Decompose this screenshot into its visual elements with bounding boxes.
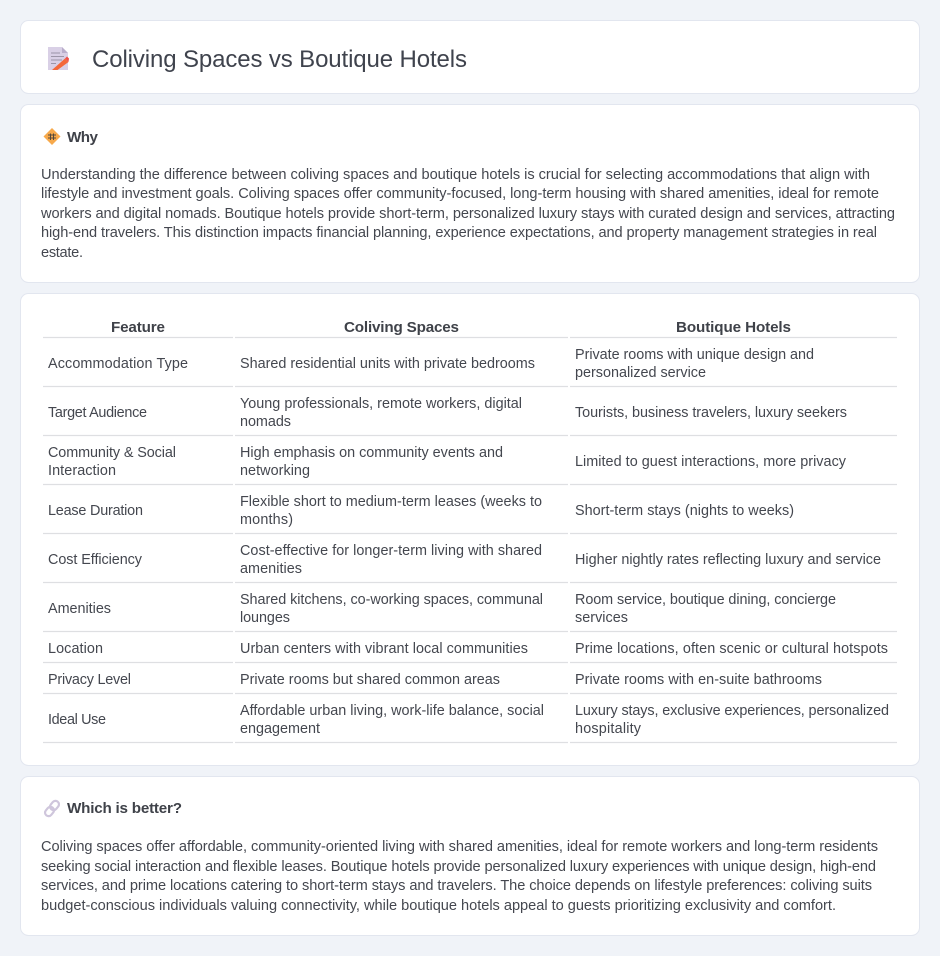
row: lease duration xyxy=(48,494,794,528)
row: ideal use: Affordable urban living, work-life balance, social xyxy=(240,703,544,719)
row: community and social interaction: networking xyxy=(240,463,310,479)
icon: link xyxy=(44,799,60,818)
row: amenities: services xyxy=(575,610,628,626)
panel: title xyxy=(20,20,920,94)
why paragraph: lifestyle and investment goals. Coliving spaces offer community-focused, long-term housing with shared amenities, ideal for remote xyxy=(41,186,879,202)
icon: document with pencil xyxy=(48,47,69,70)
row: community and social interaction: Community & Social xyxy=(48,445,176,461)
row: ideal use: Ideal Use xyxy=(48,712,106,728)
row: ideal use: hospitality xyxy=(575,721,642,737)
which is better paragraph: services, and prime locations catering to short-term stays and travelers. The choice depends on lifestyle preferences: coliving suits xyxy=(41,878,872,894)
row: cost efficiency: amenities xyxy=(240,561,302,577)
why paragraph: estate. xyxy=(41,245,83,261)
row: ideal use: engagement xyxy=(240,721,320,737)
why paragraph: workers and digital nomads. Boutique hotels provide short-term, personalized luxury stays with curated design and services, attracting xyxy=(40,206,895,222)
row: community and social interaction xyxy=(48,445,847,479)
icon: warning diamond xyxy=(44,128,60,145)
row: accommodation type xyxy=(48,347,814,381)
row: amenities: Amenities xyxy=(48,601,111,617)
row: location: Prime locations, often scenic or cultural hotspots xyxy=(575,641,888,657)
panel: comparison table xyxy=(20,294,920,766)
heading: why: Why xyxy=(67,129,99,146)
why paragraph: Understanding the difference between coliving spaces and boutique hotels is crucial for selecting accommodations that align with xyxy=(41,167,870,183)
row: cost efficiency: Cost-effective for longer-term living with shared xyxy=(240,543,542,559)
why paragraph xyxy=(40,167,895,261)
row: privacy level xyxy=(48,672,822,688)
row: accommodation type: personalized service xyxy=(575,365,706,381)
row: accommodation type: Accommodation Type xyxy=(48,356,188,372)
table header row: Boutique Hotels xyxy=(676,319,791,336)
row: target audience xyxy=(48,396,847,430)
row: lease duration: Short-term stays (nights to weeks) xyxy=(575,503,794,519)
row: privacy level: Private rooms with en-suite bathrooms xyxy=(575,672,822,688)
row: community and social interaction: High emphasis on community events and xyxy=(240,445,503,461)
row: amenities: lounges xyxy=(240,610,290,626)
row: lease duration: months) xyxy=(240,512,293,528)
panel: why xyxy=(20,104,920,282)
row: target audience: Tourists, business travelers, luxury seekers xyxy=(575,405,847,421)
row: amenities: Room service, boutique dining, concierge xyxy=(575,592,836,608)
row: ideal use: Luxury stays, exclusive experiences, personalized xyxy=(575,703,889,719)
row: cost efficiency xyxy=(48,543,881,577)
row: lease duration: Flexible short to medium-term leases (weeks to xyxy=(240,494,542,510)
table header row xyxy=(111,319,791,336)
table header row: Coliving Spaces xyxy=(344,319,459,336)
row: ideal use xyxy=(48,703,889,737)
row: accommodation type: Shared residential units with private bedrooms xyxy=(240,356,535,372)
row: amenities: Shared kitchens, co-working spaces, communal xyxy=(240,592,543,608)
table header row: Feature xyxy=(111,319,165,336)
why paragraph: high-end travelers. This distinction impacts financial planning, experience expectations, and property management strategies in real xyxy=(41,225,877,241)
row: privacy level: Privacy Level xyxy=(48,672,131,688)
row: target audience: Young professionals, remote workers, digital xyxy=(240,396,522,412)
row: location xyxy=(48,641,888,657)
row: community and social interaction: Interaction xyxy=(48,463,116,479)
row: cost efficiency: Higher nightly rates reflecting luxury and service xyxy=(575,552,881,568)
which is better paragraph: Coliving spaces offer affordable, community-oriented living with shared amenities, ideal for remote workers and long-term residents xyxy=(41,839,878,855)
heading: which is better: Which is better? xyxy=(67,800,182,817)
row: target audience: Target Audience xyxy=(48,405,147,421)
row: target audience: nomads xyxy=(240,414,291,430)
title text: Coliving Spaces vs Boutique Hotels xyxy=(92,46,467,73)
row: lease duration: Lease Duration xyxy=(48,503,143,519)
which is better paragraph xyxy=(41,839,878,914)
row: community and social interaction: Limited to guest interactions, more privacy xyxy=(575,454,847,470)
which is better paragraph: seeking social interaction and flexible leases. Boutique hotels provide personalized luxury experiences with unique design, high-end xyxy=(41,859,876,875)
row: location: Location xyxy=(48,641,103,657)
row: location: Urban centers with vibrant local communities xyxy=(240,641,528,657)
row: privacy level: Private rooms but shared common areas xyxy=(240,672,500,688)
which is better paragraph: budget-conscious individuals valuing connectivity, while boutique hotels appeal to guests prioritizing exclusivity and comfort. xyxy=(41,898,836,914)
row: accommodation type: Private rooms with unique design and xyxy=(575,347,814,363)
panel: which is better xyxy=(20,776,920,936)
row: cost efficiency: Cost Efficiency xyxy=(48,552,143,568)
row: amenities xyxy=(48,592,836,626)
